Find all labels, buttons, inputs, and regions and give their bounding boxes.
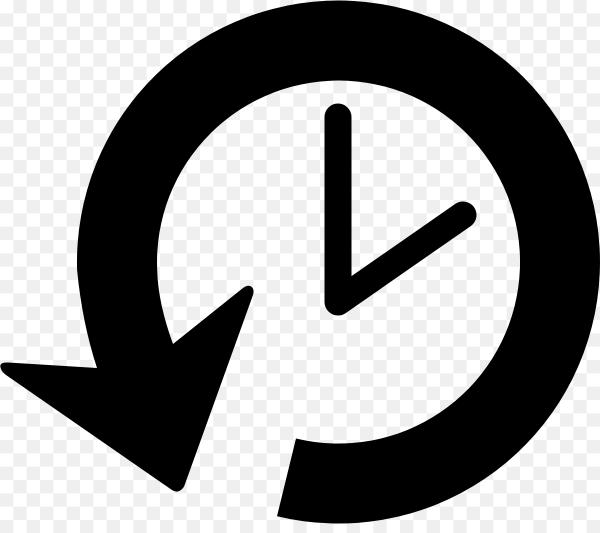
clock hands xyxy=(338,117,463,302)
